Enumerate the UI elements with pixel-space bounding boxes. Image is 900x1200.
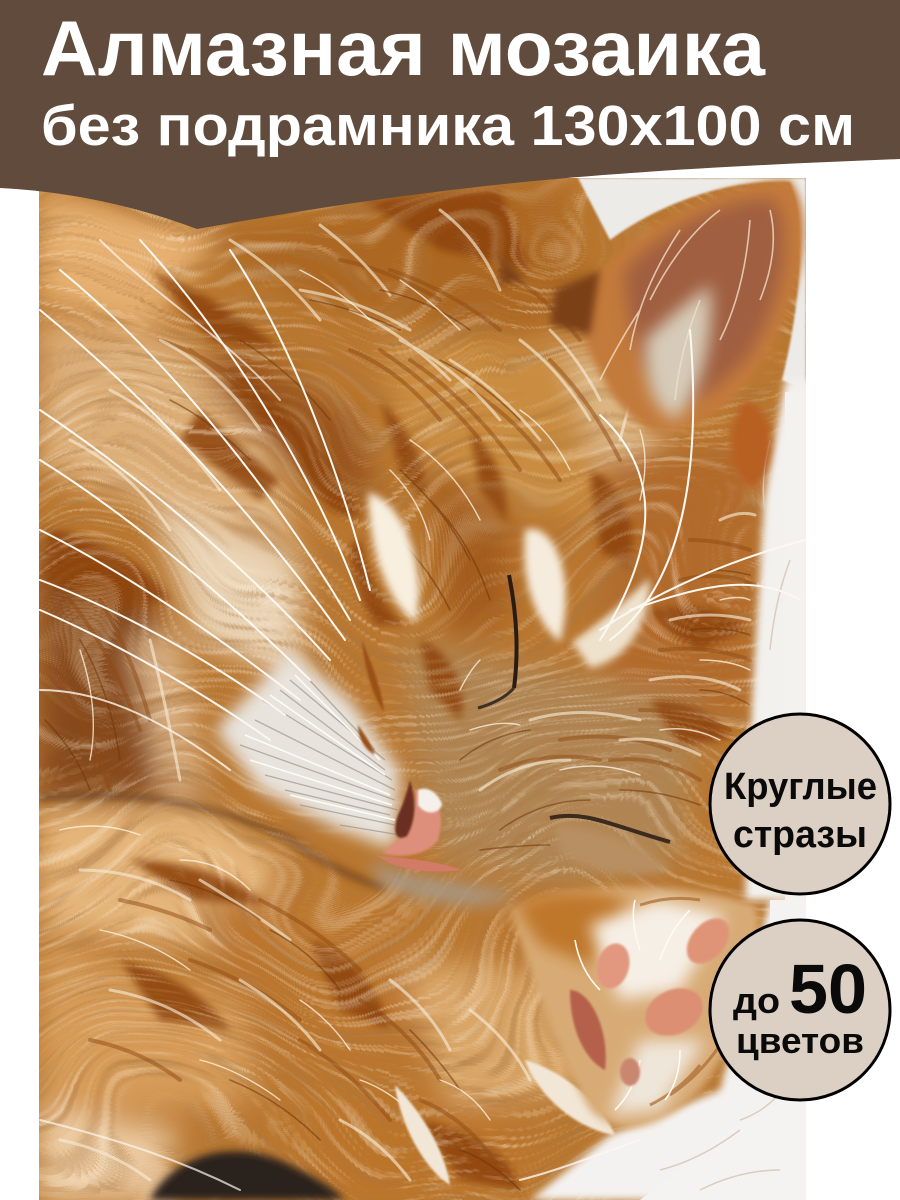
title: Алмазная мозаика [41, 4, 766, 92]
white background fur and wall [530, 178, 830, 1200]
dark orange tabby bands [45, 190, 745, 1190]
badge: round rhinestones [710, 714, 890, 894]
badge: round rhinestones: стразы [733, 814, 867, 856]
ear [500, 180, 804, 432]
large colour regions of the fur [39, 180, 760, 1200]
white muzzle and cheek [215, 492, 650, 850]
raised paw with pink pads [510, 887, 759, 1127]
neck shadow by the ear [731, 400, 771, 490]
subtitle: без подрамника 130х100 см [41, 94, 855, 158]
badge: up to 50 colours [710, 920, 890, 1100]
dark shadow under the arm [150, 1151, 345, 1200]
badge: up to 50 colours: цветов [736, 1020, 864, 1061]
badge: up to 50 colours: 50 [789, 950, 867, 1028]
whiskers [40, 240, 805, 1190]
painting base colour [39, 178, 806, 1200]
claw tufts on the arm [395, 1060, 615, 1185]
badge: up to 50 colours: до [733, 980, 780, 1021]
badge: round rhinestones: Круглые [724, 766, 877, 808]
shadow between head and arm [40, 795, 385, 888]
header banner [0, 0, 900, 229]
face: nose, mouth and closed eyes [370, 575, 670, 905]
hand-drawn fur strands [45, 210, 755, 1190]
painting: sleeping ginger cat [39, 178, 830, 1200]
fur texture overlay [39, 178, 806, 1200]
